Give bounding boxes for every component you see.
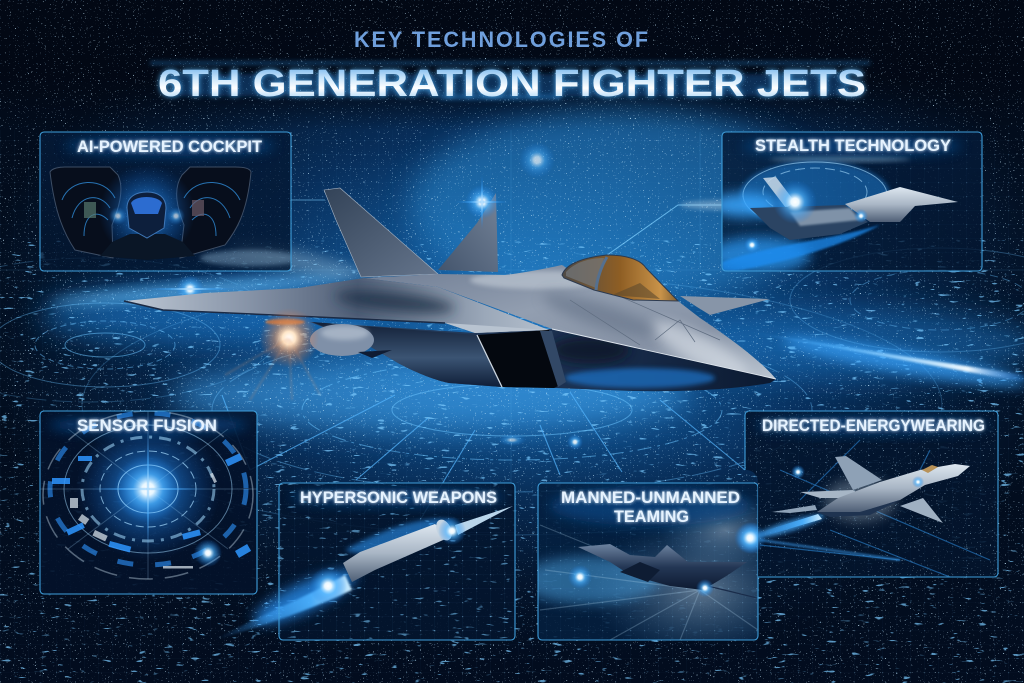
icon: energy beam	[734, 511, 900, 560]
icon: directed-energy jet	[772, 456, 970, 523]
light beams	[50, 142, 1024, 450]
far wing	[680, 296, 770, 315]
lower fuselage	[310, 322, 776, 391]
panel heading: TEAMING	[614, 508, 689, 526]
HUD rings and radial lines	[0, 130, 1024, 535]
icon: cockpit pods	[50, 164, 251, 260]
panel: AI-powered cockpit	[40, 132, 300, 271]
panel: stealth technology	[710, 132, 982, 273]
swoosh trail	[215, 519, 455, 640]
exhaust flare	[225, 308, 320, 400]
upper fuselage	[364, 265, 776, 379]
far fin	[438, 193, 498, 272]
main wing	[124, 278, 549, 333]
chine highlight	[552, 329, 776, 379]
title glow streaks	[150, 62, 870, 99]
panel heading: DIRECTED-ENERGYWEARING	[762, 417, 985, 435]
data blocks	[52, 453, 251, 558]
tail star flare	[454, 174, 510, 230]
air intake	[477, 330, 564, 388]
title	[150, 27, 870, 105]
panel heading: MANNED-UNMANNED	[561, 489, 740, 507]
radar rings	[38, 409, 258, 579]
main heading: 6TH GENERATION FIGHTER JETS	[158, 63, 866, 105]
icon: hypersonic missile	[343, 506, 513, 582]
panel heading: STEALTH TECHNOLOGY	[755, 137, 951, 155]
near fin	[324, 188, 438, 277]
panel: sensor fusion	[38, 409, 258, 594]
panel heading: SENSOR FUSION	[77, 417, 217, 435]
panel: directed-energy weapons	[734, 411, 998, 577]
engine pod	[310, 324, 374, 356]
main fighter jet	[124, 174, 776, 400]
icon: shield dome	[740, 161, 890, 229]
icon: stealth jet	[744, 177, 958, 253]
panel heading: AI-POWERED COCKPIT	[77, 138, 262, 156]
panel: hypersonic weapons	[215, 483, 515, 640]
panel: manned-unmanned teaming	[537, 482, 759, 640]
panel heading	[561, 489, 740, 526]
cockpit canopy	[562, 255, 678, 301]
icon: manned jet and drone	[578, 544, 757, 598]
kicker: KEY TECHNOLOGIES OF	[354, 27, 650, 52]
panel heading: HYPERSONIC WEAPONS	[300, 489, 497, 507]
